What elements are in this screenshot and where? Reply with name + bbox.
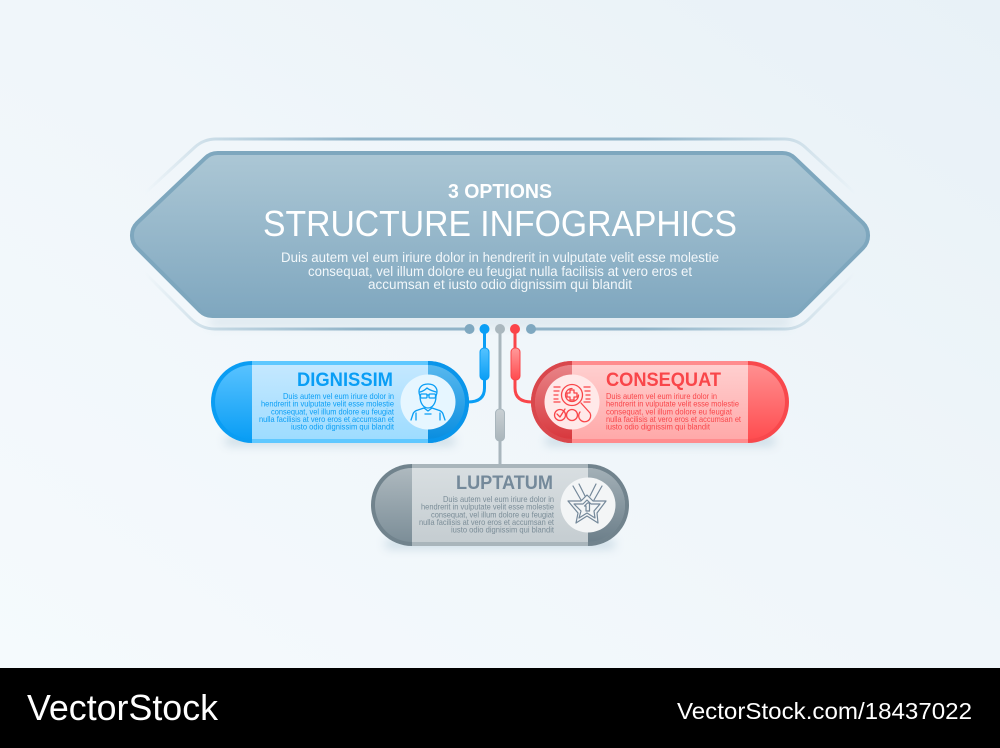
- connector: red: [510, 324, 532, 402]
- text: luptatum body: [419, 494, 555, 534]
- text: consequat body: [606, 391, 742, 432]
- banner description: [281, 250, 719, 292]
- text: luptatum body: Duis autem vel eum iriure dolor in: [443, 494, 554, 504]
- text: dignissim body: iusto odio dignissim qui blandit: [291, 422, 395, 432]
- connector: blue: [468, 324, 490, 402]
- connector: banner end dots: [464, 324, 536, 334]
- banner subtitle: 3 OPTIONS: [448, 181, 552, 203]
- text: consequat body: consequat, vel illum dolore eu feugiat: [606, 406, 733, 416]
- main hexagon banner: [132, 153, 868, 326]
- banner description: consequat, vel illum dolore eu feugiat nulla facilisis at vero eros et: [308, 264, 692, 279]
- text: dignissim body: [259, 391, 395, 432]
- text: luptatum body: iusto odio dignissim qui blandit: [451, 524, 555, 534]
- panel: dignissim: [211, 361, 469, 445]
- text: luptatum body: consequat, vel illum dolore eu feugiat: [431, 510, 555, 520]
- panel: consequat: [531, 361, 789, 445]
- text: dignissim body: consequat, vel illum dolore eu feugiat: [271, 406, 395, 416]
- icon: person with glasses: [400, 374, 456, 430]
- footer url: VectorStock.com/18437022: [677, 698, 972, 724]
- text: dignissim body: Duis autem vel eum iriure dolor in: [283, 391, 394, 401]
- text: dignissim body: hendrerit in vulputate velit esse molestie: [261, 398, 394, 408]
- heading: luptatum: LUPTATUM: [456, 473, 553, 494]
- icon: magnifier with medical cross: [544, 374, 600, 430]
- text: luptatum body: nulla facilisis at vero eros et accumsan et: [419, 517, 555, 527]
- outer frame lines: [145, 139, 855, 329]
- text: luptatum body: hendrerit in vulputate velit esse molestie: [421, 502, 554, 512]
- panel: luptatum: [371, 464, 629, 548]
- heading: consequat: CONSEQUAT: [606, 370, 721, 391]
- heading: dignissim: DIGNISSIM: [297, 370, 393, 391]
- connector: grey: [495, 324, 505, 464]
- footer bar: [0, 668, 1000, 748]
- banner title: STRUCTURE INFOGRAPHICS: [263, 203, 737, 244]
- text: consequat body: hendrerit in vulputate velit esse molestie: [606, 398, 739, 408]
- icon: star badge: [560, 478, 616, 532]
- text: dignissim body: nulla facilisis at vero eros et accumsan et: [259, 414, 395, 424]
- banner description: accumsan et iusto odio dignissim qui blandit: [368, 277, 632, 292]
- text: consequat body: iusto odio dignissim qui blandit: [606, 422, 711, 432]
- text: consequat body: Duis autem vel eum iriure dolor in: [606, 391, 717, 401]
- footer logo: VectorStock: [27, 687, 219, 728]
- text: consequat body: nulla facilisis at vero eros et accumsan et: [606, 414, 742, 424]
- banner description: Duis autem vel eum iriure dolor in hendrerit in vulputate velit esse molestie: [281, 250, 719, 265]
